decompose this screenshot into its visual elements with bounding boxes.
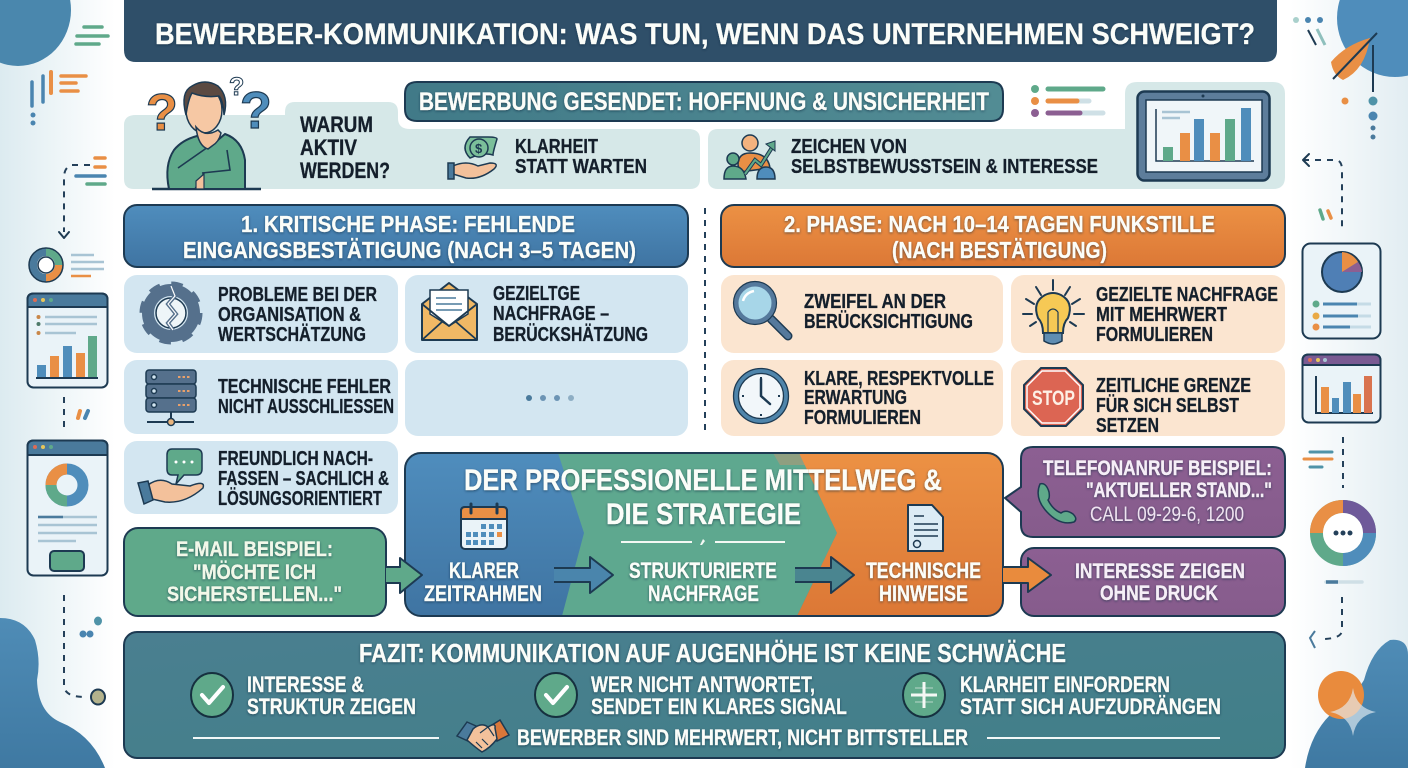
- text: warum aktiv werden: WARUM: [300, 112, 373, 137]
- text: [493, 283, 648, 346]
- decorative blob: top right: [1337, 0, 1408, 77]
- heading: [464, 464, 942, 531]
- widget: pie chart card: [1302, 244, 1380, 338]
- step labels: HINWEISE: [879, 581, 968, 606]
- text: ZWEIFEL AN DER: [804, 291, 946, 313]
- panel: zeichen von selbstbewusstsein: [708, 82, 1285, 189]
- panel: warum aktiv werden: [124, 73, 700, 189]
- text: TECHNISCHE FEHLER: [218, 376, 391, 398]
- card: klare erwartung: [721, 360, 1003, 436]
- icon: orange circle with star: [1318, 671, 1376, 736]
- panel: interesse zeigen ohne druck: OHNE DRUCK: [1100, 581, 1218, 605]
- panel: fazit: [124, 632, 1285, 758]
- text: [804, 368, 994, 429]
- text: klarheit statt warten: KLARHEIT: [515, 135, 598, 158]
- icon: blue question mark: ?: [240, 82, 272, 140]
- icon: thinking person: [146, 73, 272, 189]
- text: interesse: [247, 672, 416, 719]
- text: WERTSCHÄTZUNG: [218, 323, 366, 346]
- text: GEZIELTE NACHFRAGE: [1096, 284, 1278, 306]
- text: BERÜCKSHÄTZUNG: [493, 323, 648, 346]
- text: klarheit einfordern: KLARHEIT EINFORDERN: [960, 672, 1170, 697]
- text: zeichen von selbstbewusstsein: SELBSTBEWUSSTSEIN & INTERESSE: [791, 155, 1098, 178]
- text: [218, 448, 389, 510]
- step labels: NACHFRAGE: [648, 581, 759, 606]
- icon: light bulb: [1023, 280, 1084, 344]
- step labels: TECHNISCHE: [866, 558, 981, 583]
- decorative blob: bottom left: [0, 618, 105, 768]
- icon: laptop chart: [1138, 92, 1270, 180]
- decorative blob: bottom right: [1305, 640, 1408, 768]
- text: GEZIELTGE: [493, 283, 580, 305]
- icon: four colour donut: [1316, 506, 1370, 560]
- panel: interesse zeigen ohne druck: INTERESSE ZEIGEN: [1075, 559, 1245, 583]
- header: phase 2: 2. PHASE: NACH 10–14 TAGEN FUNKSTILLE: [784, 211, 1215, 237]
- step labels: KLARER: [449, 558, 519, 583]
- icon: phone: [1038, 484, 1076, 523]
- text: FREUNDLICH NACH-: [218, 448, 373, 470]
- icon: server rack: [146, 370, 196, 426]
- card: placeholder dots: [405, 360, 688, 436]
- text: interesse: STRUKTUR ZEIGEN: [247, 694, 416, 719]
- icon: handshake: [457, 720, 509, 752]
- arrow: step 1 to 2: [554, 557, 613, 593]
- step labels: ZEITRAHMEN: [424, 581, 542, 606]
- icon: envelope: [422, 283, 477, 340]
- title: BEWERBER-KOMMUNIKATION: WAS TUN, WENN DAS UNTERNEHMEN SCHWEIGT?: [155, 18, 1255, 51]
- text: "AKTUELLER STAND...": [1086, 478, 1272, 502]
- icon: segmented ring with text lines: [29, 248, 104, 282]
- text: KLARE, RESPEKTVOLLE: [804, 368, 994, 390]
- panel: e-mail beispiel: E-MAIL BEISPIEL:: [176, 537, 333, 561]
- icon: clock: [734, 368, 788, 424]
- text: FORMULIEREN: [804, 407, 921, 429]
- icon: magnifying glass: [734, 282, 788, 336]
- icon: check one: [191, 673, 233, 717]
- text: warum aktiv werden: AKTIV: [300, 135, 357, 160]
- widget: chart window purple header: [1302, 354, 1380, 422]
- card: gezielte nachfrage: [405, 275, 688, 353]
- text: wer nicht antwortet: [591, 672, 847, 719]
- step labels: STRUKTURIERTE: [629, 558, 777, 583]
- left decorations: [30, 27, 108, 704]
- text: klarheit statt warten: STATT WARTEN: [515, 155, 647, 178]
- arrow: center to interest: [1003, 558, 1051, 592]
- arrow: step 2 to 3: [795, 557, 854, 593]
- text: ORGANISATION &: [218, 304, 361, 326]
- header: phase 1: [124, 205, 688, 267]
- text: FORMULIEREN: [1096, 324, 1213, 346]
- header: phase 2: (NACH BESTÄTIGUNG): [892, 237, 1107, 263]
- title bar: [124, 0, 1277, 62]
- text: bewerber sind mehrwert: BEWERBER SIND MEHRWERT, NICHT BITTSTELLER: [517, 725, 968, 750]
- panel: telefonanruf beispiel: [1005, 447, 1285, 537]
- text: warum aktiv werden: [300, 112, 390, 183]
- text: wer nicht antwortet: SENDET EIN KLARES SIGNAL: [591, 694, 847, 719]
- text: CALL 09-29-6, 1200: [1090, 502, 1244, 526]
- text: MIT MEHRWERT: [1096, 304, 1227, 326]
- text: FÜR SICH SELBST: [1096, 394, 1239, 417]
- icon: stop sign: STOP: [1032, 387, 1075, 410]
- icon: orange question mark: ?: [146, 84, 178, 142]
- icon: hand with speech bubble: [138, 449, 203, 504]
- text: SETZEN: [1096, 415, 1159, 437]
- panel: der professionelle mittelweg: [405, 453, 1003, 616]
- header: phase 1: 1. KRITISCHE PHASE: FEHLENDE: [241, 211, 575, 237]
- banner: bewerbung gesendet: BEWERBUNG GESENDET: HOFFNUNG & UNSICHERHEIT: [419, 88, 989, 116]
- text: klarheit statt warten: [515, 135, 647, 178]
- card: freundlich nachfassen: [124, 441, 398, 514]
- right decorations: [1293, 17, 1378, 648]
- panel: e-mail beispiel: [124, 528, 386, 616]
- text: warum aktiv werden: WERDEN?: [300, 158, 390, 183]
- text: LÖSUNGSORIENTIERT: [218, 487, 382, 510]
- text: [1096, 284, 1278, 346]
- icon: progress bars: [1031, 85, 1103, 117]
- text: [218, 376, 394, 418]
- widget: browser window with donut: [28, 440, 108, 576]
- step labels: [424, 558, 981, 606]
- icon: calendar: [461, 504, 507, 549]
- card: zeitliche grenze: [1011, 360, 1285, 437]
- heading: DER PROFESSIONELLE MITTELWEG &: [464, 464, 942, 497]
- icon: document: [908, 505, 943, 551]
- panel: e-mail beispiel: "MÖCHTE ICH: [193, 559, 316, 584]
- card: zweifel: [721, 275, 1003, 353]
- arrow: email to center: [386, 558, 422, 593]
- text: [218, 284, 377, 346]
- banner: bewerbung gesendet: [405, 82, 1003, 121]
- text: zeichen von selbstbewusstsein: ZEICHEN VON: [791, 135, 907, 158]
- text: NACHFRAGE –: [493, 303, 609, 325]
- text: BERÜCKSICHTIGUNG: [804, 310, 973, 333]
- text: [1043, 456, 1272, 526]
- text: zeichen von selbstbewusstsein: [791, 135, 1098, 178]
- text: PROBLEME BEI DER: [218, 284, 377, 306]
- icon: small question mark: ?: [229, 73, 244, 101]
- decorative blob: top left: [0, 0, 71, 66]
- heading: DIE STRATEGIE: [606, 498, 801, 531]
- header: phase 1: EINGANGSBESTÄTIGUNG (NACH 3–5 TAGEN): [183, 237, 636, 263]
- icon: cracked gear: [143, 285, 199, 341]
- text: klarheit einfordern: [960, 672, 1221, 719]
- text: NICHT AUSSCHLIESSEN: [218, 396, 394, 418]
- text: interesse: INTERESSE &: [247, 672, 364, 697]
- text: FASSEN – SACHLICH &: [218, 468, 389, 490]
- icon: plus: [903, 673, 945, 717]
- card: probleme organisation: [124, 275, 398, 353]
- header: phase 2: [721, 205, 1285, 267]
- text: ERWARTUNG: [804, 387, 907, 409]
- text: ZEITLICHE GRENZE: [1096, 375, 1251, 397]
- heading: FAZIT: KOMMUNIKATION AUF AUGENHÖHE IST KEINE SCHWÄCHE: [359, 638, 1066, 668]
- icon: check two: [535, 673, 577, 717]
- card: gezielte nachfrage mehrwert: [1011, 275, 1285, 353]
- icon: hand with money: $: [475, 141, 483, 156]
- card: technische fehler: [124, 360, 398, 434]
- text: [804, 291, 973, 333]
- icon: stop sign: [1024, 368, 1083, 426]
- widget: browser window with bar chart: [28, 294, 108, 388]
- text: klarheit einfordern: STATT SICH AUFZUDRÄNGEN: [960, 694, 1221, 719]
- text: wer nicht antwortet: WER NICHT ANTWORTET,: [591, 672, 815, 697]
- panel: interesse zeigen ohne druck: [1021, 548, 1285, 616]
- panel: e-mail beispiel: SICHERSTELLEN...": [167, 582, 342, 606]
- text: TELEFONANRUF BEISPIEL:: [1043, 456, 1272, 480]
- text: [1096, 375, 1251, 437]
- icon: team with rising arrow: [724, 135, 775, 179]
- icon: hand with money: [448, 137, 497, 179]
